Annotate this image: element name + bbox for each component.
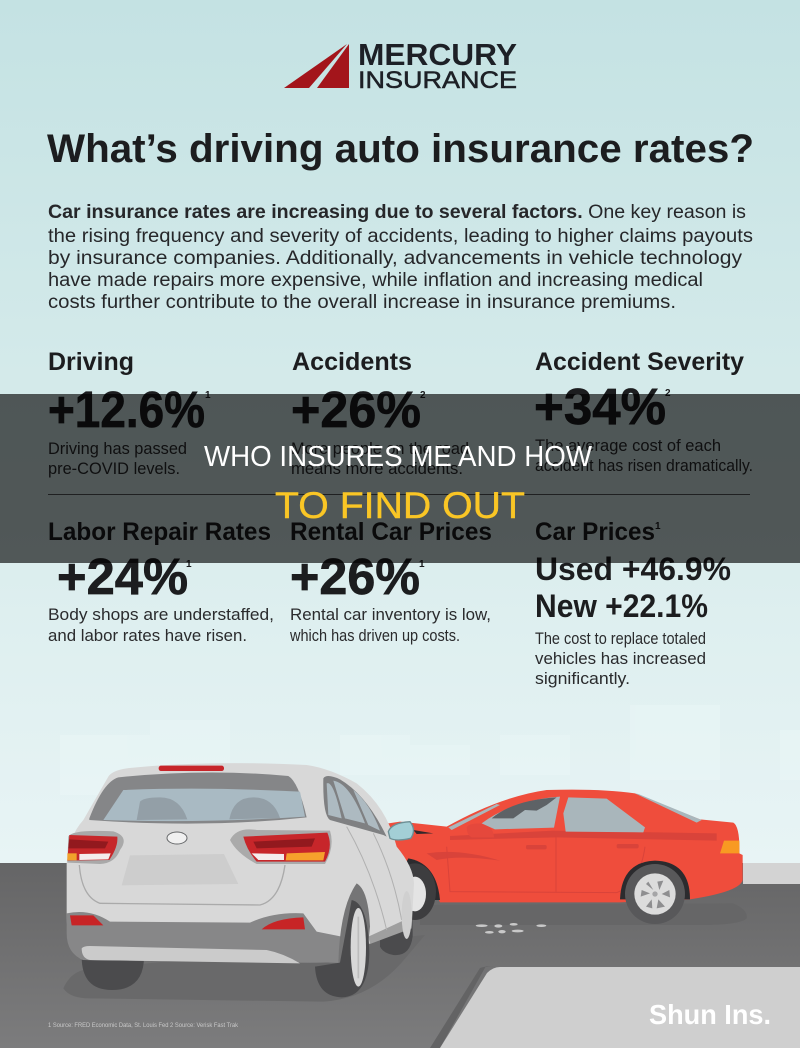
logo wordmark: INSURANCE — [358, 67, 517, 94]
stat: rental car prices — [289, 518, 492, 645]
intro paragraph: by insurance companies. Additionally, advancements in vehicle technology — [48, 248, 743, 269]
debris on road — [476, 923, 546, 934]
stat: rental car prices: which has driven up costs. — [289, 626, 460, 645]
side mirror — [388, 822, 414, 840]
door lines — [447, 835, 645, 893]
rear window strip — [635, 793, 702, 823]
stat: accident severity: +34% — [534, 378, 666, 435]
car emblem — [167, 832, 187, 844]
stat: labor repair rates — [48, 518, 274, 645]
side shade and sill — [368, 917, 412, 944]
stat: labor repair rates: and labor rates have risen. — [48, 626, 247, 645]
stat: accident severity: Accident Severity — [535, 348, 744, 376]
red car shadow — [420, 903, 747, 925]
lower bumper dark trim — [67, 912, 342, 963]
logo: Mercury Insurance — [284, 37, 517, 94]
red car body — [367, 790, 743, 902]
stat: car prices: Car Prices — [535, 518, 655, 546]
stat: car prices: 1 — [655, 521, 661, 532]
stat: accident severity: accident has risen dramatically. — [535, 456, 753, 475]
side mirror — [467, 823, 494, 837]
stat: rental car prices: +26% — [290, 548, 420, 605]
door lines — [347, 827, 402, 930]
logo wordmark — [358, 37, 517, 94]
stat: driving: pre-COVID levels. — [48, 459, 180, 478]
stat: driving: Driving — [48, 348, 134, 376]
SUV body — [67, 763, 414, 963]
stat: rental car prices: Rental Car Prices — [290, 518, 492, 546]
stat: accidents: More people on the road — [291, 439, 469, 458]
hood windshield strip — [448, 804, 500, 830]
illustration: white SUV — [63, 763, 425, 1002]
stat: car prices: The cost to replace totaled — [535, 629, 706, 648]
stat: accidents: +26% — [291, 381, 421, 438]
left taillight — [67, 831, 124, 864]
intro paragraph: Car insurance rates are increasing due to several factors. One key reason is — [48, 202, 746, 223]
front side window — [482, 797, 560, 829]
stat: accident severity: The average cost of each — [535, 436, 721, 455]
license plate recess — [122, 854, 238, 885]
stat: driving: Driving has passed — [48, 439, 187, 458]
intro paragraph — [48, 202, 753, 313]
stat: labor repair rates: 1 — [186, 559, 192, 570]
door handles — [526, 844, 639, 849]
stat: labor repair rates: Labor Repair Rates — [48, 518, 271, 546]
bumper silver plate — [82, 946, 300, 963]
stat: driving — [48, 348, 211, 478]
stat: car prices: Used +46.9% — [535, 551, 731, 587]
stat: driving: +12.6% — [48, 381, 205, 438]
logo wordmark: MERCURY — [358, 37, 517, 72]
road surface — [0, 863, 800, 1048]
watermark: Shun Ins. — [649, 999, 771, 1030]
stat: car prices: significantly. — [535, 669, 630, 688]
stat: driving: 1 — [205, 390, 211, 401]
body crease and dent — [427, 831, 717, 861]
shattered window area — [492, 797, 557, 818]
rear side window — [563, 797, 645, 832]
icon: red road triangle — [284, 44, 349, 88]
stat: rental car prices: 1 — [419, 559, 425, 570]
rear window glass — [103, 789, 305, 821]
near rear wheel — [315, 883, 370, 997]
front wheel — [394, 858, 440, 920]
stat: accidents: Accidents — [292, 348, 412, 376]
near sidewalk corner — [430, 966, 800, 1048]
stat: labor repair rates: Body shops are understaffed, — [48, 605, 274, 624]
roof spoiler brake light — [159, 766, 224, 771]
stat: accident severity: 2 — [665, 388, 671, 399]
hood vent — [413, 830, 433, 834]
rear seats — [137, 797, 280, 820]
overlay headline line two: TO FIND OUT — [275, 485, 525, 526]
intro paragraph: the rising frequency and severity of accidents, leading to higher claims payouts — [48, 226, 753, 247]
far wheels — [82, 957, 144, 990]
title: What’s driving auto insurance rates? — [47, 127, 754, 171]
stat: car prices: vehicles has increased — [535, 649, 706, 668]
intro paragraph: costs further contribute to the overall increase in insurance premiums. — [48, 292, 676, 313]
stat: accidents: 2 — [420, 390, 426, 401]
rear wheel — [620, 861, 690, 924]
intro paragraph: have made repairs more expensive, while inflation and increasing medical — [48, 270, 703, 291]
stat: accidents — [291, 348, 469, 478]
rear windshield — [89, 772, 307, 824]
far front wheel rim — [402, 891, 412, 939]
stat: accidents: means more accidents. — [291, 459, 463, 478]
far sidewalk — [743, 863, 800, 884]
footnote sources: 1 Source: FRED Economic Data, St. Louis Fed 2 Source: Verisk Fast Trak — [48, 1022, 239, 1029]
stat: car prices: New +22.1% — [535, 588, 708, 624]
rear reflectors — [70, 915, 305, 929]
background city skyline — [60, 705, 800, 795]
overlay headline line one: WHO INSURES ME AND HOW — [204, 441, 592, 473]
tail light — [720, 841, 739, 853]
stat: labor repair rates: +24% — [57, 548, 188, 605]
divider line — [48, 494, 750, 495]
trunk outline — [79, 865, 285, 905]
illustration: red sedan — [367, 790, 747, 934]
title overlay band — [0, 394, 800, 563]
side windows — [323, 776, 387, 837]
stat: rental car prices: Rental car inventory is low, — [290, 605, 491, 624]
right taillight — [230, 829, 332, 864]
stat: accident severity — [534, 348, 753, 475]
stat: car prices — [535, 518, 731, 688]
SUV shadow — [63, 935, 425, 1002]
